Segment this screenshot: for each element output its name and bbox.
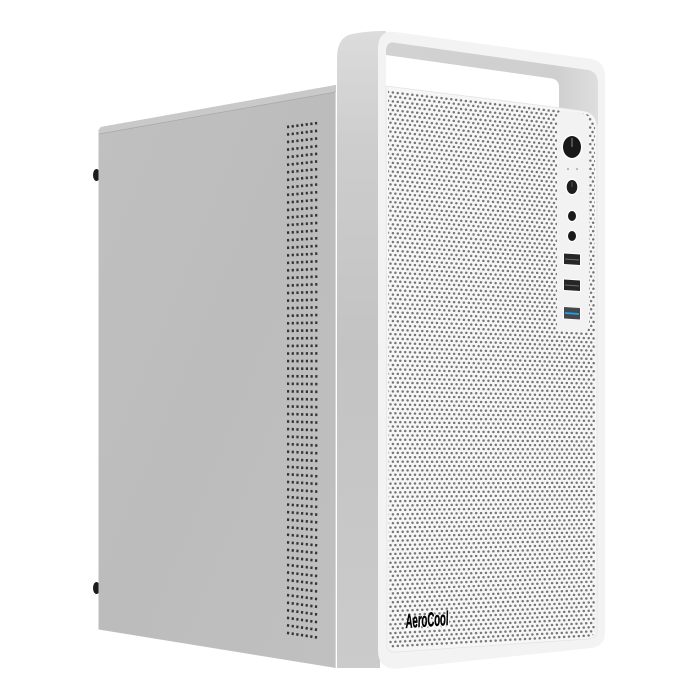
icon: power button: [562, 134, 582, 160]
icon: USB 2.0 port upper: [563, 252, 581, 266]
product illustration: white PC tower case: AeroCool: [405, 609, 450, 634]
handle opening: [386, 55, 559, 108]
panel: front bezel side return and carry handle: [337, 31, 605, 669]
product illustration: white PC tower case: [93, 31, 605, 668]
panel: front I/O strip: [557, 110, 589, 331]
handle underside: [386, 42, 598, 125]
icon: USB 2.0 port lower: [563, 278, 581, 292]
white front bezel: [378, 32, 605, 669]
icon: headphone jack: [567, 210, 577, 222]
icon: reset button: [566, 178, 578, 196]
icon: upper rear thumbscrew: [93, 169, 100, 181]
icon: lower rear thumbscrew: [93, 582, 100, 594]
icon: microphone jack: [567, 230, 577, 242]
brand logo: [404, 608, 450, 634]
product illustration: white PC tower case: AeroCool: [404, 608, 449, 633]
panel: side panel: [98, 85, 336, 668]
top lip of side panel: [98, 85, 336, 134]
icon: status LEDs: [567, 168, 578, 170]
side ventilation perforations: [287, 123, 318, 638]
panel: perforated front mesh: [386, 86, 597, 652]
icon: USB 3.0 port with blue tongue: [563, 306, 581, 320]
